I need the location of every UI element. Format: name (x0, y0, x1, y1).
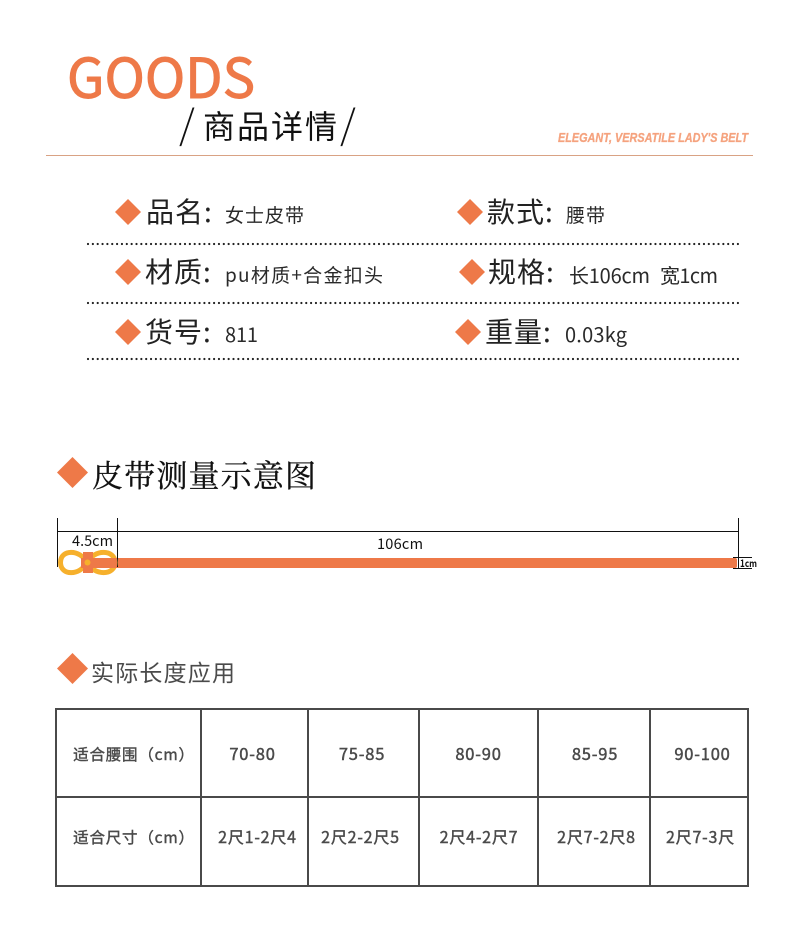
dimension label: length: 106cm (377, 533, 423, 554)
row: chinese size (73, 824, 735, 848)
spec: product name: 品名: (146, 191, 213, 231)
spec: style: 腰带 (566, 201, 606, 228)
spec: weight: 重量: (485, 311, 552, 351)
spec: weight: 0.03kg (565, 319, 627, 348)
spec: material: pu材质+合金扣头 (225, 261, 384, 288)
table grid (56, 709, 748, 886)
row: waist: 70-80 (229, 741, 276, 765)
icon: belt buckle (60, 552, 117, 573)
row: waist: 适合腰围（cm） (73, 743, 195, 765)
title: GOODS: GOODS (67, 34, 255, 114)
row: chinese size: 2尺7-3尺 (666, 824, 735, 848)
tagline: ELEGANT, VERSATILE LADY'S BELT (558, 130, 749, 145)
heading: actual length application: 实际长度应用 (91, 654, 235, 688)
spec: material: 材质: (145, 251, 212, 291)
spec: size (459, 251, 718, 291)
dimension label: buckle: 4.5cm (72, 530, 113, 551)
spec: style (457, 191, 606, 231)
spec: product name (115, 191, 305, 231)
dimension label: width: 1cm (740, 555, 757, 570)
diagram: belt with dimensions (58, 518, 757, 573)
spec: item number (115, 311, 258, 351)
row: waist: 85-95 (572, 741, 618, 765)
row: chinese size: 2尺2-2尺5 (321, 824, 400, 848)
spec: item number: 811 (225, 319, 258, 348)
panel: product specifications (88, 191, 738, 359)
subtitle: product details: 商品详情 (203, 102, 339, 148)
spec: material (115, 251, 384, 291)
dimension lines (58, 518, 752, 568)
subtitle: product details (179, 93, 356, 151)
belt strap (88, 558, 737, 568)
heading: belt measurement diagram: 皮带测量示意图 (92, 451, 316, 496)
row: waist: 80-90 (455, 741, 502, 765)
spec: item number: 货号: (145, 311, 212, 351)
spec: weight (455, 311, 627, 351)
table: size chart (56, 709, 748, 886)
row: waist: 90-100 (674, 741, 731, 765)
subtitle: product details: / (179, 93, 195, 151)
row: chinese size: 2尺1-2尺4 (218, 824, 297, 848)
spec: size: 长106cm (569, 260, 650, 289)
spec: product name: 女士皮带 (225, 201, 305, 228)
spec: size: 规格: (488, 251, 555, 291)
row: waist: 75-85 (339, 741, 385, 765)
spec: size: 宽1cm (660, 260, 718, 289)
row: chinese size: 适合尺寸（cm） (73, 826, 195, 848)
subtitle: product details: / (340, 93, 356, 151)
row: waist (73, 741, 731, 765)
spec: style: 款式: (487, 191, 554, 231)
row: chinese size: 2尺4-2尺7 (440, 824, 518, 848)
row: chinese size: 2尺7-2尺8 (557, 824, 636, 848)
